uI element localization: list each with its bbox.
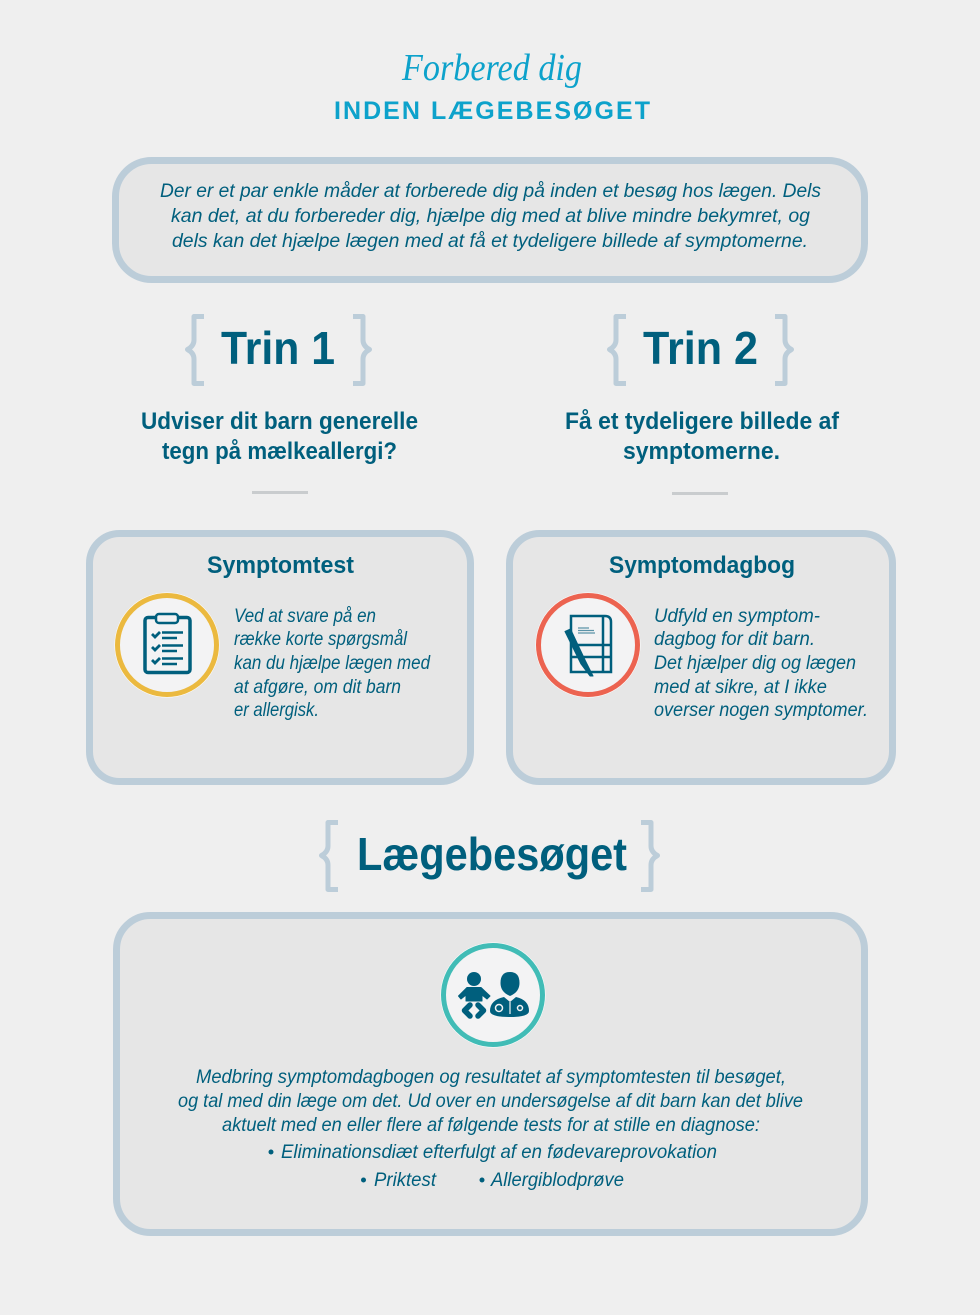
heading: Symptomtest: Symptomtest [207,552,354,579]
heading: Symptomdagbog: Symptomdagbog [609,552,795,579]
text: visit description [178,1067,803,1136]
text: Symptomtest description [234,606,431,721]
list: tests: Allergiblodprøve [490,1170,624,1191]
text: step 1 question: Udviser dit barn generelle [141,408,418,435]
panel: intro [116,160,864,280]
panel: intro: dels kan det hjælpe lægen med at få et tydeligere billede af symptomerne. [172,230,808,252]
text: Symptomtest description: er allergisk. [234,700,319,721]
title [334,47,650,125]
text: Symptomdagbog description: med at sikre, at I ikke [654,677,827,698]
heading: Trin 2: Trin 2 [643,322,758,374]
text: visit description: Medbring symptomdagbogen og resultatet af symptomtesten til besøget, [196,1067,786,1088]
text: Symptomtest description: Ved at svare på en [234,606,376,627]
text: Symptomdagbog description: Det hjælper dig og lægen [654,653,856,674]
icon: clipboard checklist [115,593,219,697]
list: tests: Eliminationsdiæt efterfulgt af en fødevareprovokation [281,1142,717,1163]
text: Symptomtest description: kan du hjælpe lægen med [234,653,431,674]
list: tests: Priktest [374,1170,437,1191]
text: visit description: aktuelt med en eller flere af følgende tests for at stille en diagnose: [222,1115,760,1136]
text: visit description: og tal med din læge om det. Ud over en undersøgelse af dit barn kan det blive [178,1091,803,1112]
icon: baby and doctor [441,943,545,1047]
heading: Lægebesøget [322,822,658,890]
panel: intro: Der er et par enkle måder at forberede dig på inden et besøg hos lægen. Dels [160,180,821,202]
panel: Lægebesøget [116,916,864,1232]
icon: notebook and pen [536,593,640,697]
text: Symptomdagbog description: dagbog for dit barn. [654,629,815,650]
text: step 1 question: tegn på mælkeallergi? [162,438,397,465]
panel: Symptomtest [90,534,470,782]
heading: Trin 2 [610,316,792,384]
panel: intro: kan det, at du forbereder dig, hjælpe dig med at blive mindre bekymret, og [171,205,810,227]
text: Symptomdagbog description [654,606,868,721]
list: tests [268,1142,717,1191]
text: Symptomdagbog description: overser nogen symptomer. [654,700,868,721]
text: step 2 description: symptomerne. [623,438,780,465]
text: step 2 description: Få et tydeligere billede af [565,408,840,435]
text: Symptomtest description: at afgøre, om dit barn [234,677,401,698]
text: step 2 description [565,408,840,465]
panel: Symptomdagbog [510,534,892,782]
text: Symptomdagbog description: Udfyld en symptom- [654,606,820,627]
heading: Trin 1 [188,316,370,384]
text: step 1 question [141,408,418,465]
title: Forbered dig [401,47,582,89]
title: INDEN LÆGEBESØGET [334,97,650,125]
text: Symptomtest description: række korte spørgsmål [234,629,408,650]
heading: Lægebesøget: Lægebesøget [357,828,627,880]
heading: Trin 1: Trin 1 [221,322,335,374]
